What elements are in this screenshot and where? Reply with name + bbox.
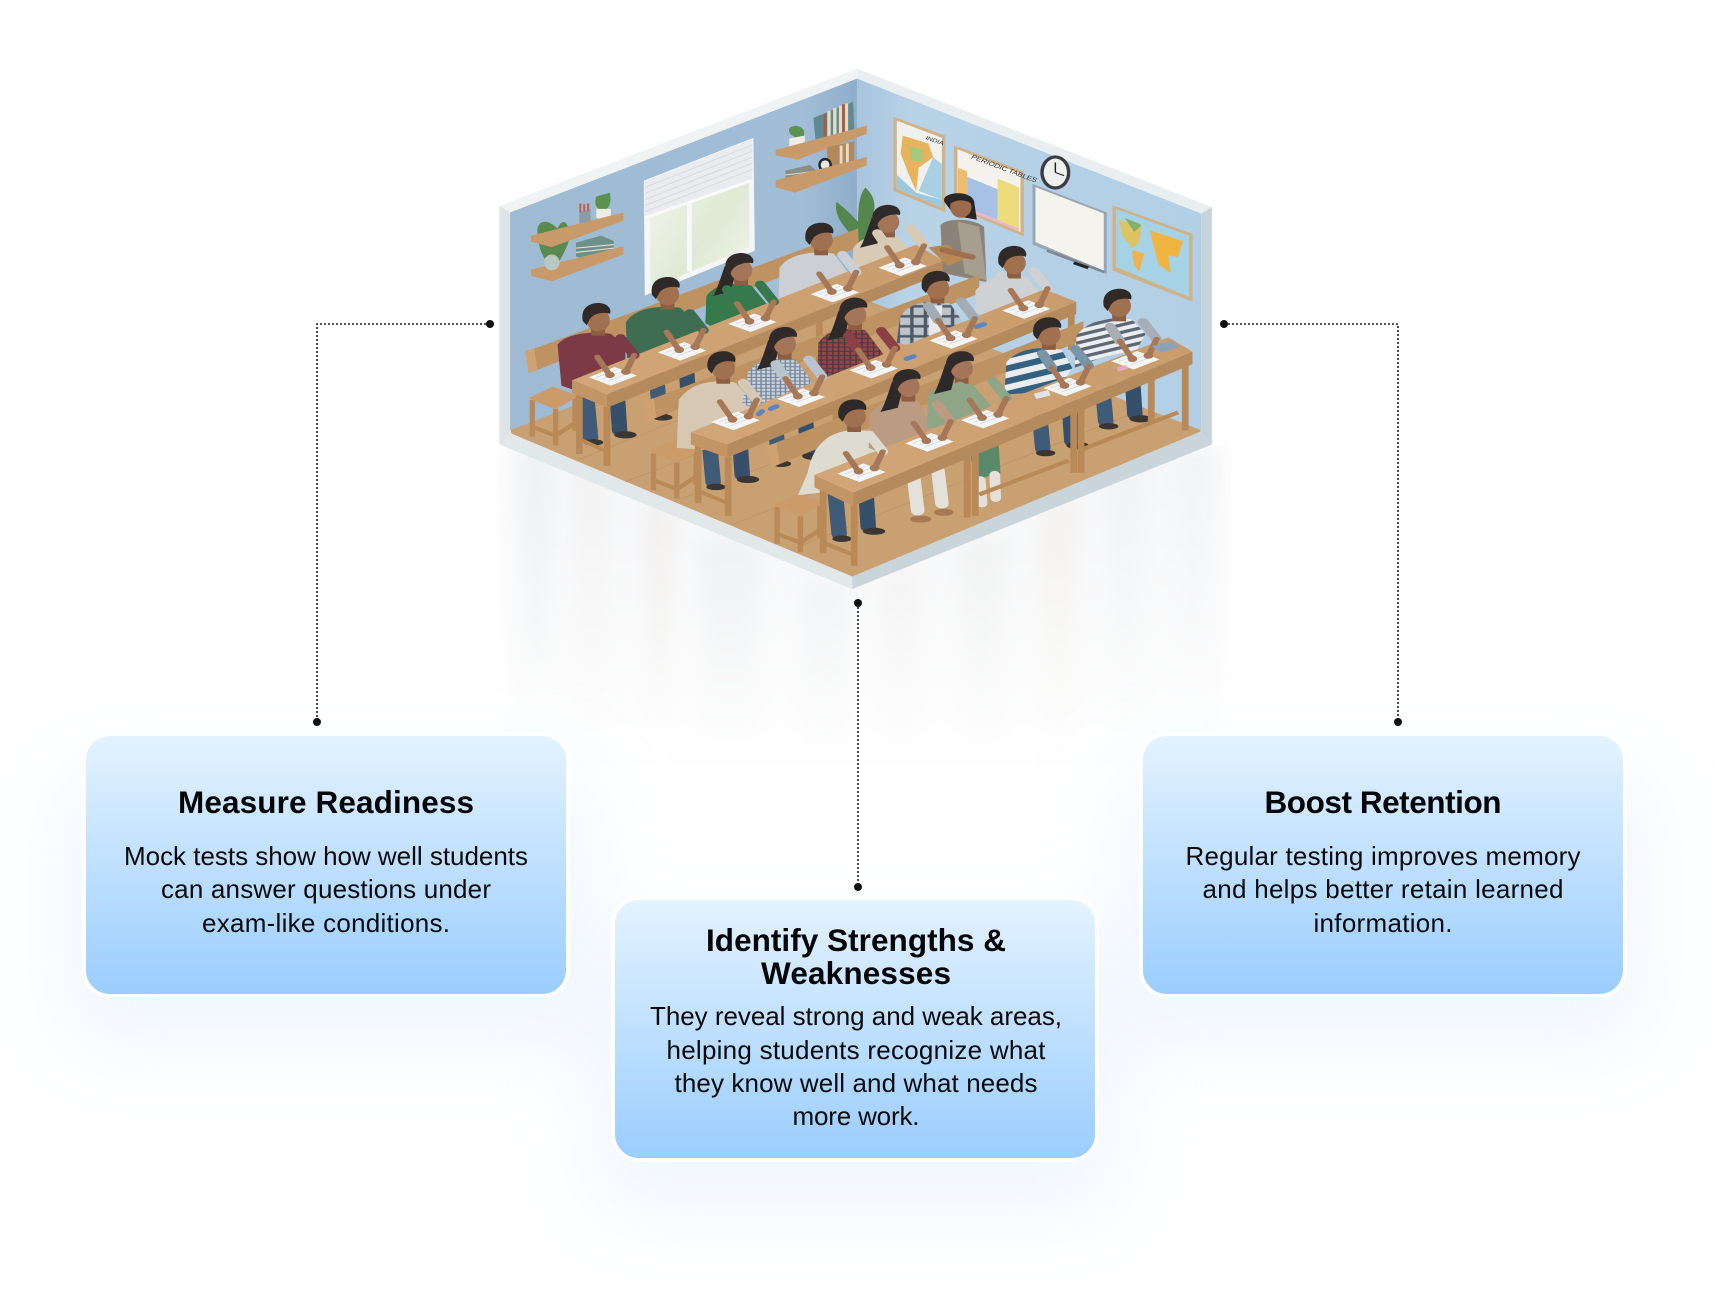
panel: Measure Readiness xyxy=(84,734,568,996)
poster: India map: INDIA xyxy=(924,135,946,147)
illustration: isometric classroom xyxy=(499,69,1212,589)
heading: Boost Retention xyxy=(1264,784,1502,820)
heading: Identify Strengths & xyxy=(706,922,1006,958)
body text: and helps better retain learned xyxy=(1202,874,1564,904)
poster: India map xyxy=(893,117,946,212)
body text: Mock tests show how well students xyxy=(124,841,528,871)
body text xyxy=(650,1001,1062,1131)
panel: Boost Retention xyxy=(1141,734,1625,996)
stool row 2 xyxy=(650,440,700,499)
connector: right xyxy=(1220,320,1402,726)
body text: Regular testing improves memory xyxy=(1186,841,1580,871)
row 2 bench xyxy=(644,275,979,421)
students row 3 xyxy=(798,289,1145,495)
left wall shelves xyxy=(531,193,623,281)
students row 2 xyxy=(677,246,1038,450)
body text xyxy=(1186,841,1580,938)
row 1 bench xyxy=(525,229,859,373)
floor planks xyxy=(577,321,1144,550)
row 3 bench xyxy=(766,321,1083,468)
body text: can answer questions under xyxy=(161,874,491,904)
body text: They reveal strong and weak areas, xyxy=(650,1001,1062,1031)
heading: Measure Readiness xyxy=(178,784,474,820)
wall clock xyxy=(1040,155,1070,190)
heading: Weaknesses xyxy=(761,955,951,991)
students row 1 xyxy=(558,205,915,395)
panel: Identify Strengths & Weaknesses xyxy=(613,898,1097,1160)
whiteboard xyxy=(1033,184,1107,274)
teacher xyxy=(928,193,987,282)
stool row 1 xyxy=(528,387,579,445)
window xyxy=(644,138,755,296)
room shell xyxy=(499,69,1212,589)
body text: information. xyxy=(1314,908,1452,938)
student legs row 2 xyxy=(706,409,825,490)
body text: they know well and what needs xyxy=(674,1068,1038,1098)
desk row 1 xyxy=(572,229,943,466)
body text: exam-like conditions. xyxy=(202,908,450,938)
student legs row 3 xyxy=(832,371,1152,542)
poster: world map xyxy=(1113,205,1193,302)
glow: card shadows xyxy=(60,770,1650,1215)
student legs row 1 xyxy=(584,362,706,446)
connector: left xyxy=(313,320,494,726)
heading xyxy=(706,922,1006,991)
floor reflection xyxy=(513,450,1216,648)
poster: periodic table xyxy=(954,145,1039,236)
desk row 2 xyxy=(691,271,1076,516)
body text: more work. xyxy=(792,1101,920,1131)
stool row 3 xyxy=(773,494,824,552)
body text: helping students recognize what xyxy=(666,1035,1046,1065)
poster: periodic table: PERIODIC TABLES xyxy=(969,153,1039,184)
connector: center xyxy=(854,599,862,891)
corner shelves and books xyxy=(776,102,867,193)
potted plant xyxy=(836,187,891,250)
desk row 3 xyxy=(814,322,1193,566)
body text xyxy=(124,841,528,938)
